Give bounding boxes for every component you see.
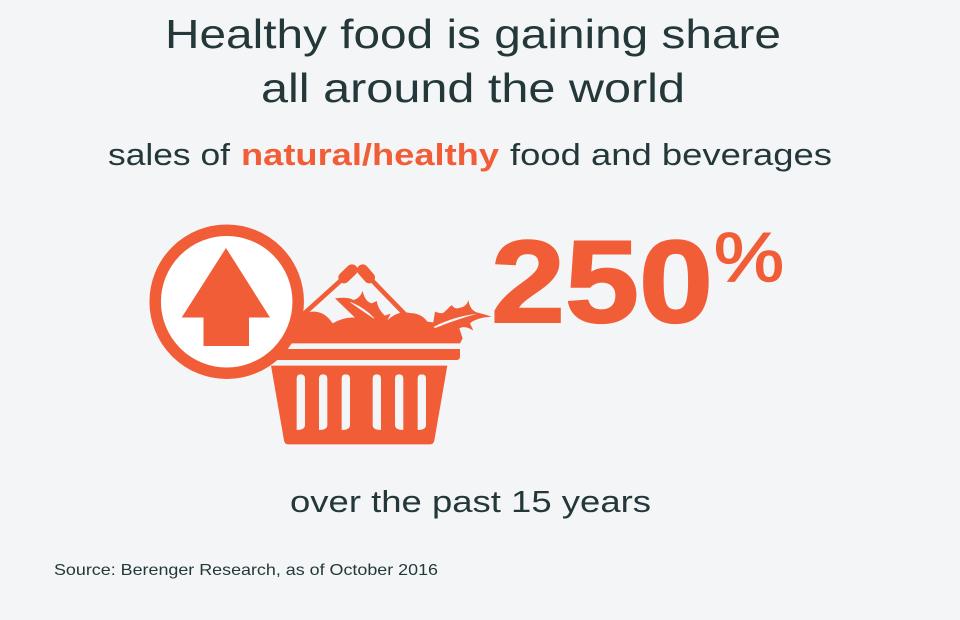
big number <box>491 216 784 347</box>
icon: basket of healthy food <box>271 270 492 444</box>
subtitle: food and beverages <box>510 137 832 172</box>
basket rim <box>273 349 460 360</box>
subtitle <box>108 137 832 172</box>
basket handles <box>303 270 405 314</box>
subtitle: natural/healthy <box>241 137 500 172</box>
basket body <box>271 366 447 444</box>
leaf vein <box>433 314 477 328</box>
title: all around the world <box>261 65 685 111</box>
title: Healthy food is gaining share <box>165 11 781 57</box>
subtitle: sales of <box>108 137 230 172</box>
icon: up arrow in circle <box>155 230 298 373</box>
caption: over the past 15 years <box>290 484 651 519</box>
big number: % <box>714 218 784 296</box>
big number: 250 <box>491 216 713 347</box>
food mound <box>287 291 492 343</box>
title <box>165 11 781 111</box>
source note: Source: Berenger Research, as of October 2016 <box>54 562 438 579</box>
